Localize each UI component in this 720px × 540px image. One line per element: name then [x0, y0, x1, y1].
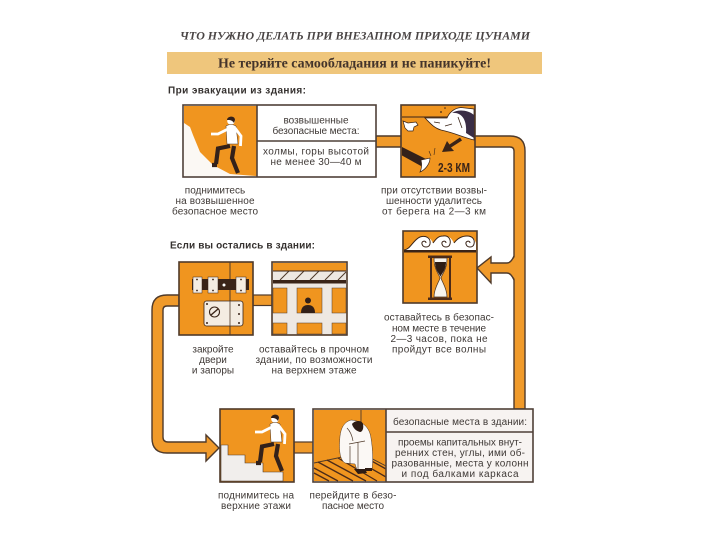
panel text: холмы, горы высотой — [263, 146, 369, 158]
icon: man climbing stairs — [255, 415, 285, 471]
connector: door to building — [253, 295, 272, 306]
banner — [167, 52, 542, 74]
icon: hourglass — [428, 256, 452, 300]
icon: man climbing slope — [184, 106, 257, 176]
title: ЧТО НУЖНО ДЕЛАТЬ ПРИ ВНЕЗАПНОМ ПРИХОДЕ ЦУНАМИ — [180, 28, 531, 42]
icon: bolt — [192, 277, 249, 293]
caption: wait — [384, 312, 494, 356]
caption: move to safe place — [310, 490, 396, 512]
panel text: безопасные места в здании: — [393, 416, 527, 428]
icon: waves — [404, 236, 476, 252]
caption: move to safe place: пасное место — [322, 501, 384, 512]
caption: wait: пройдут все волны — [392, 344, 486, 356]
caption: move to safe place: перейдите в безо- — [310, 490, 396, 502]
icon: white stairs — [221, 445, 283, 481]
caption: lock doors: закройте — [192, 344, 234, 356]
connector: stairs to shelter — [294, 442, 313, 453]
arrow: into waiting panel — [477, 254, 516, 283]
caption: stay in building — [256, 344, 372, 376]
caption: go upstairs: поднимитесь на — [218, 490, 294, 502]
panel text: разованные, места у колонн — [392, 458, 528, 470]
panel text: безопасные места: — [272, 125, 360, 137]
icon: running leg — [402, 147, 435, 172]
panel text: и под балками каркаса — [402, 468, 519, 480]
caption: no hill: при отсутствии возвы- — [381, 186, 487, 196]
arrow: left route pipe — [152, 295, 219, 461]
panel text: ренних стен, углы, ими об- — [395, 447, 525, 459]
icon: hand — [403, 121, 418, 131]
icon: hatched ceiling — [273, 270, 346, 284]
panel text: не менее 30—40 м — [270, 157, 362, 168]
caption: climb — [172, 186, 258, 218]
distance label: 2-3 КМ — [438, 161, 470, 175]
caption: lock doors — [192, 344, 234, 376]
icon: lock — [204, 301, 243, 326]
panel text: возвышенные — [283, 116, 349, 126]
caption: climb: поднимитесь — [185, 186, 245, 196]
panel: safe places in building — [313, 409, 533, 482]
arrow: top route pipe — [376, 136, 525, 409]
heading: in building: Если вы остались в здании: — [170, 240, 315, 252]
icon: arrow — [442, 138, 462, 152]
caption: stay in building: здании, по возможности — [256, 355, 372, 366]
panel text: проемы капитальных внут- — [398, 438, 522, 448]
caption: no hill: от берега на 2—3 км — [382, 206, 486, 218]
panel text — [392, 416, 528, 480]
caption: climb: безопасное место — [172, 206, 258, 218]
caption: no hill: шенности удалитесь — [386, 196, 482, 207]
caption: stay in building: на верхнем этаже — [272, 366, 357, 376]
icon: person in window — [301, 298, 315, 313]
icon: crouching person — [314, 410, 386, 481]
heading: evacuation: При эвакуации из здания: — [168, 86, 306, 96]
caption: wait: оставайтесь в безопас- — [384, 312, 494, 324]
panel: run from wave — [401, 105, 475, 177]
caption: lock doors: и запоры — [192, 366, 234, 376]
caption: go upstairs: верхние этажи — [221, 501, 291, 512]
panel: high safe places — [183, 105, 376, 177]
panel text — [263, 116, 369, 168]
caption: stay in building: оставайтесь в прочном — [259, 344, 369, 356]
banner: Не теряйте самообладания и не паникуйте! — [218, 56, 491, 70]
caption: no hill — [381, 186, 487, 218]
caption: go upstairs — [218, 490, 294, 512]
panel: upper floor — [272, 262, 347, 335]
panel: stairs — [220, 409, 294, 482]
caption: wait: 2—3 часов, пока не — [390, 334, 488, 345]
caption: lock doors: двери — [199, 355, 227, 366]
caption: climb: на возвышенное — [176, 196, 255, 207]
icon: windows — [273, 288, 346, 334]
caption: wait: ном месте в течение — [392, 324, 486, 334]
panel: hourglass — [403, 231, 477, 303]
icon: wave — [402, 107, 474, 140]
panel: doors — [179, 262, 253, 335]
